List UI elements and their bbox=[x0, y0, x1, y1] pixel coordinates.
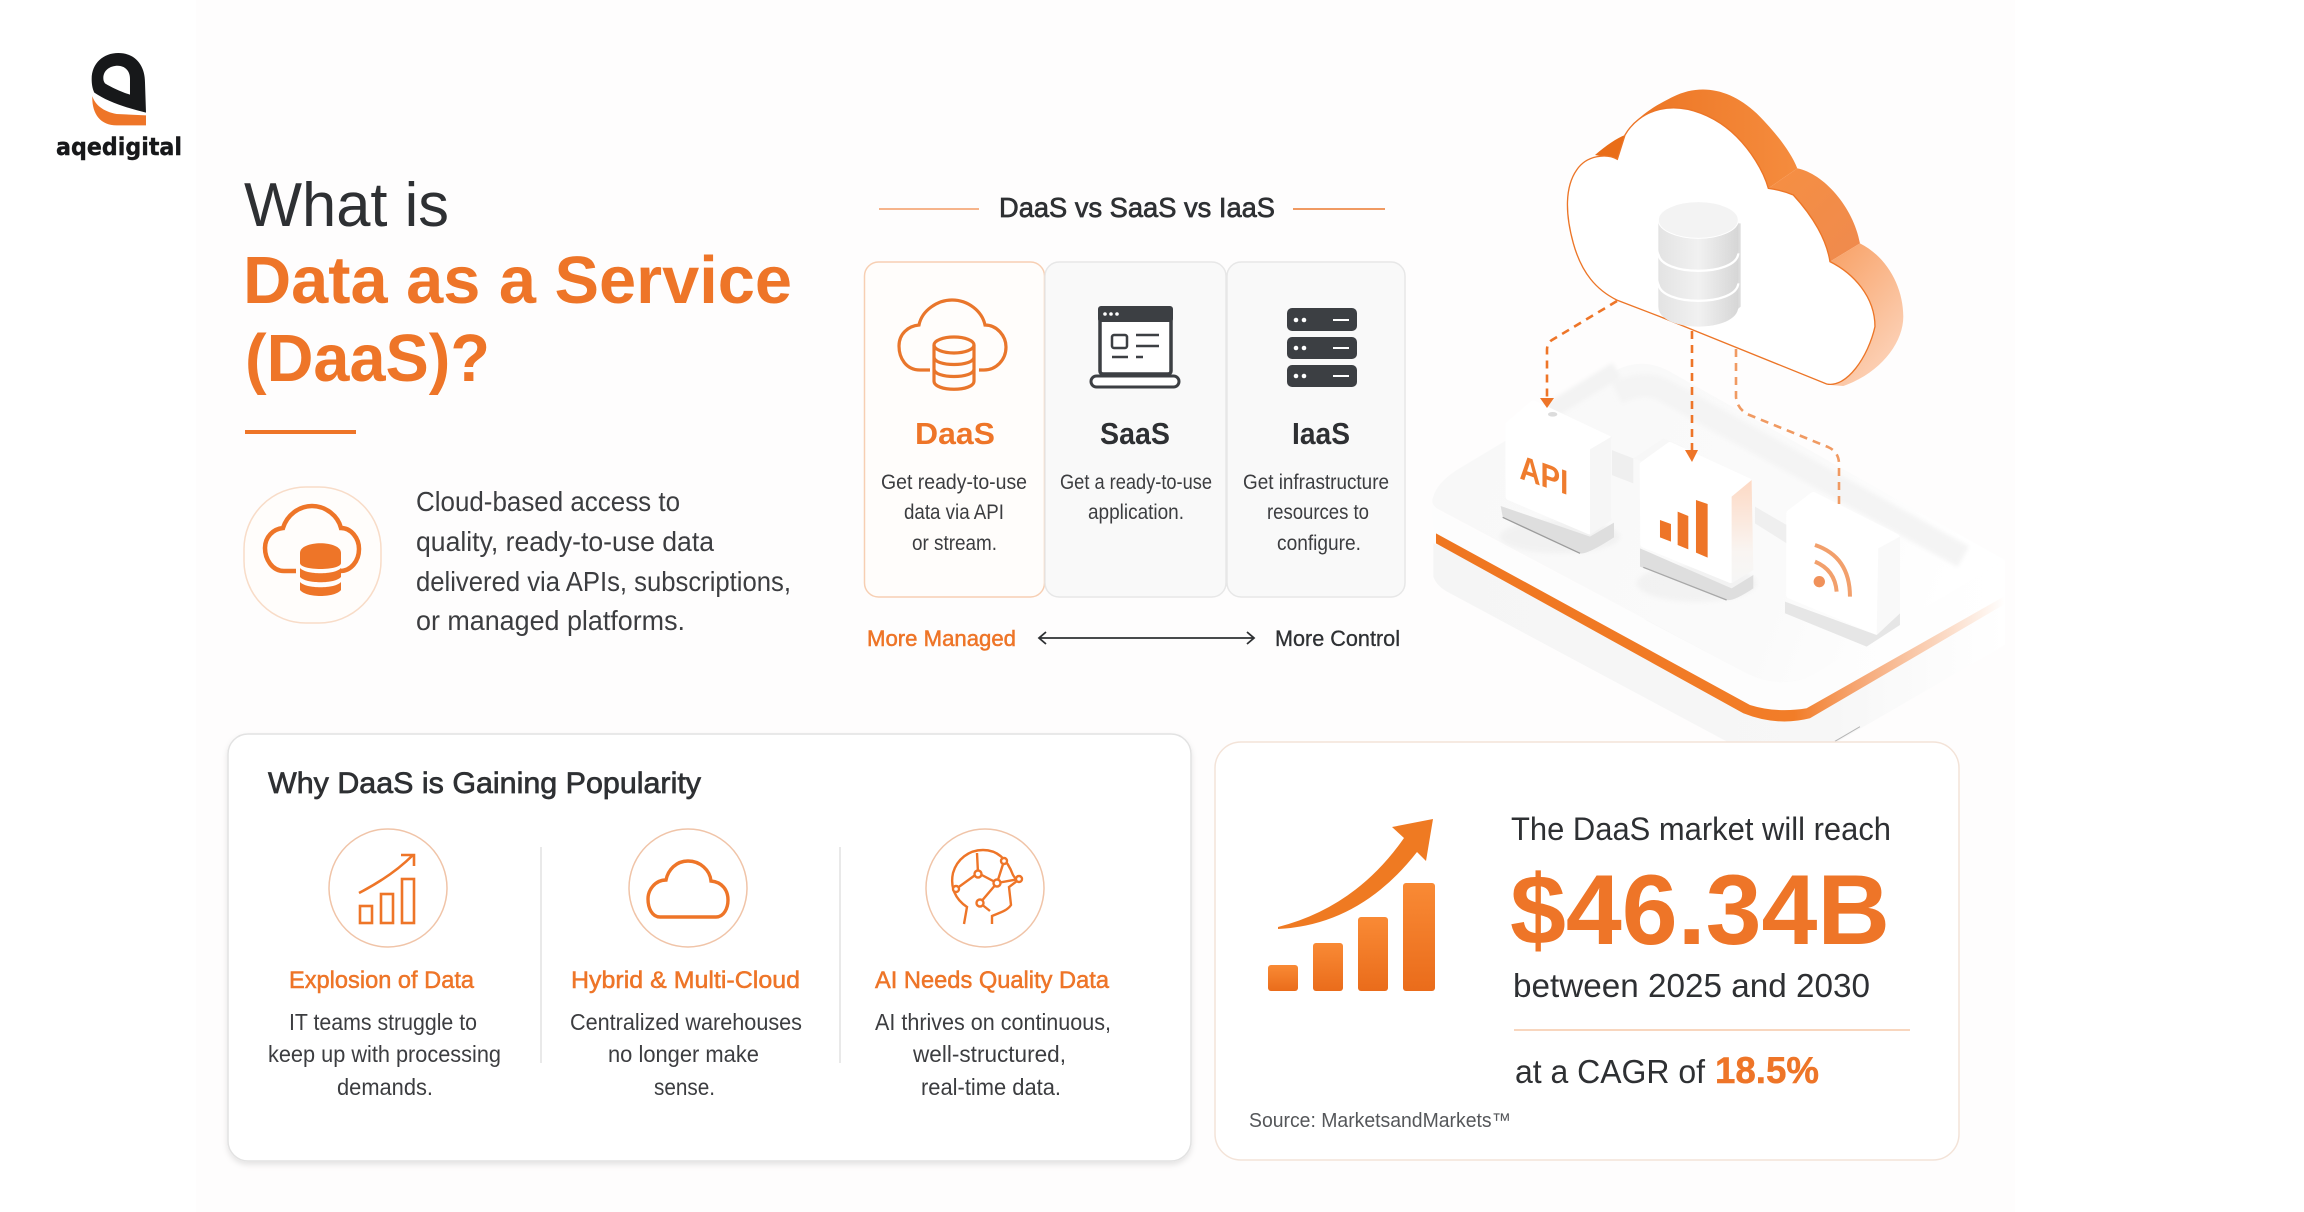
icon: cloud with database bbox=[899, 300, 1006, 389]
tile: API: API bbox=[1519, 448, 1568, 503]
card: IaaS: Get infrastructure bbox=[1243, 471, 1389, 494]
title: What is bbox=[244, 171, 449, 240]
scale: managed to control: More Control bbox=[1275, 626, 1400, 651]
platform bbox=[1432, 364, 2005, 743]
comparison: DaaS vs SaaS vs IaaS bbox=[864, 192, 1405, 651]
arrow: double headed bbox=[1039, 632, 1254, 644]
icon: server stack bbox=[1287, 308, 1357, 387]
cloud bbox=[1567, 89, 1903, 386]
source note: Source: MarketsandMarkets™ bbox=[1249, 1110, 1511, 1132]
tile: chart bbox=[1637, 446, 1757, 602]
title: (DaaS)? bbox=[245, 321, 490, 396]
card: IaaS: resources to bbox=[1267, 501, 1369, 524]
connector: dashed to API bbox=[1547, 301, 1839, 512]
item: hybrid and multi-cloud: Hybrid & Multi-Cloud bbox=[571, 967, 800, 994]
database bbox=[1658, 202, 1741, 327]
card: SaaS: Get a ready-to-use bbox=[1060, 471, 1212, 494]
scale: managed to control: More Managed bbox=[867, 626, 1016, 651]
icon: cloud database badge bbox=[244, 487, 381, 623]
card: SaaS: SaaS bbox=[1100, 416, 1170, 451]
card: DaaS: or stream. bbox=[912, 532, 997, 555]
card: SaaS bbox=[1045, 262, 1226, 597]
definition text: delivered via APIs, subscriptions, bbox=[416, 566, 791, 597]
item: AI needs quality data: AI thrives on continuous, bbox=[875, 1009, 1111, 1035]
panel: market forecast bbox=[1215, 742, 1959, 1160]
forecast text: between 2025 and 2030 bbox=[1513, 967, 1870, 1004]
tile: API bbox=[1500, 404, 1620, 553]
definition text: quality, ready-to-use data bbox=[416, 526, 714, 557]
item: explosion of data: Explosion of Data bbox=[289, 967, 475, 994]
item: AI needs quality data: AI Needs Quality Data bbox=[875, 967, 1110, 994]
definition text: or managed platforms. bbox=[416, 605, 685, 636]
forecast text bbox=[1510, 811, 1910, 1091]
card: DaaS: data via API bbox=[904, 501, 1004, 524]
item: AI needs quality data bbox=[875, 829, 1111, 1100]
item: AI needs quality data: well-structured, bbox=[912, 1041, 1066, 1067]
item: explosion of data bbox=[268, 829, 501, 1100]
card: IaaS: configure. bbox=[1277, 532, 1361, 555]
connector: dashed to feed bbox=[1736, 349, 1839, 512]
item: hybrid and multi-cloud: Centralized warehouses bbox=[570, 1009, 802, 1035]
comparison heading: DaaS vs SaaS vs IaaS bbox=[999, 192, 1275, 223]
chart: growth bars with arrow bbox=[1268, 819, 1435, 991]
definition text: Cloud-based access to bbox=[416, 486, 680, 517]
logo wordmark: aqedigital bbox=[56, 133, 182, 161]
definition block bbox=[244, 486, 791, 636]
card: DaaS: DaaS bbox=[915, 416, 995, 451]
panel: why DaaS is gaining popularity bbox=[228, 734, 1191, 1161]
illustration: cloud platform bbox=[1432, 89, 2005, 743]
card: IaaS bbox=[1227, 262, 1405, 597]
arrow: growth bbox=[1278, 819, 1433, 929]
title bbox=[243, 171, 792, 396]
forecast text: at a CAGR of bbox=[1515, 1053, 1706, 1090]
item: explosion of data: keep up with processing bbox=[268, 1041, 501, 1067]
tile: feed bbox=[1785, 496, 1900, 647]
panel heading: Why DaaS is Gaining Popularity bbox=[268, 767, 701, 800]
icon: cloud bbox=[629, 829, 747, 947]
icon: rising chart bbox=[329, 829, 447, 947]
card: SaaS: application. bbox=[1088, 501, 1184, 524]
card: DaaS: Get ready-to-use bbox=[881, 471, 1027, 494]
card: IaaS: IaaS bbox=[1292, 416, 1350, 451]
card: DaaS bbox=[864, 262, 1044, 597]
item: hybrid and multi-cloud: no longer make bbox=[608, 1041, 759, 1067]
logo: aqedigital bbox=[56, 53, 182, 161]
forecast text: 18.5% bbox=[1715, 1050, 1819, 1091]
icon: AI head bbox=[926, 829, 1044, 947]
forecast text: $46.34B bbox=[1510, 854, 1890, 965]
item: hybrid and multi-cloud: sense. bbox=[654, 1074, 715, 1100]
connector: dashed to chart bbox=[1691, 331, 1693, 450]
item: explosion of data: IT teams struggle to bbox=[289, 1009, 477, 1035]
title: Data as a Service bbox=[243, 243, 792, 318]
icon: laptop application bbox=[1091, 306, 1179, 387]
forecast text: The DaaS market will reach bbox=[1511, 811, 1891, 847]
item: hybrid and multi-cloud bbox=[570, 829, 802, 1100]
item: explosion of data: demands. bbox=[337, 1074, 433, 1100]
scale: managed to control bbox=[867, 626, 1400, 651]
definition text bbox=[416, 486, 791, 636]
item: AI needs quality data: real-time data. bbox=[921, 1074, 1061, 1100]
logo mark bbox=[92, 53, 146, 125]
